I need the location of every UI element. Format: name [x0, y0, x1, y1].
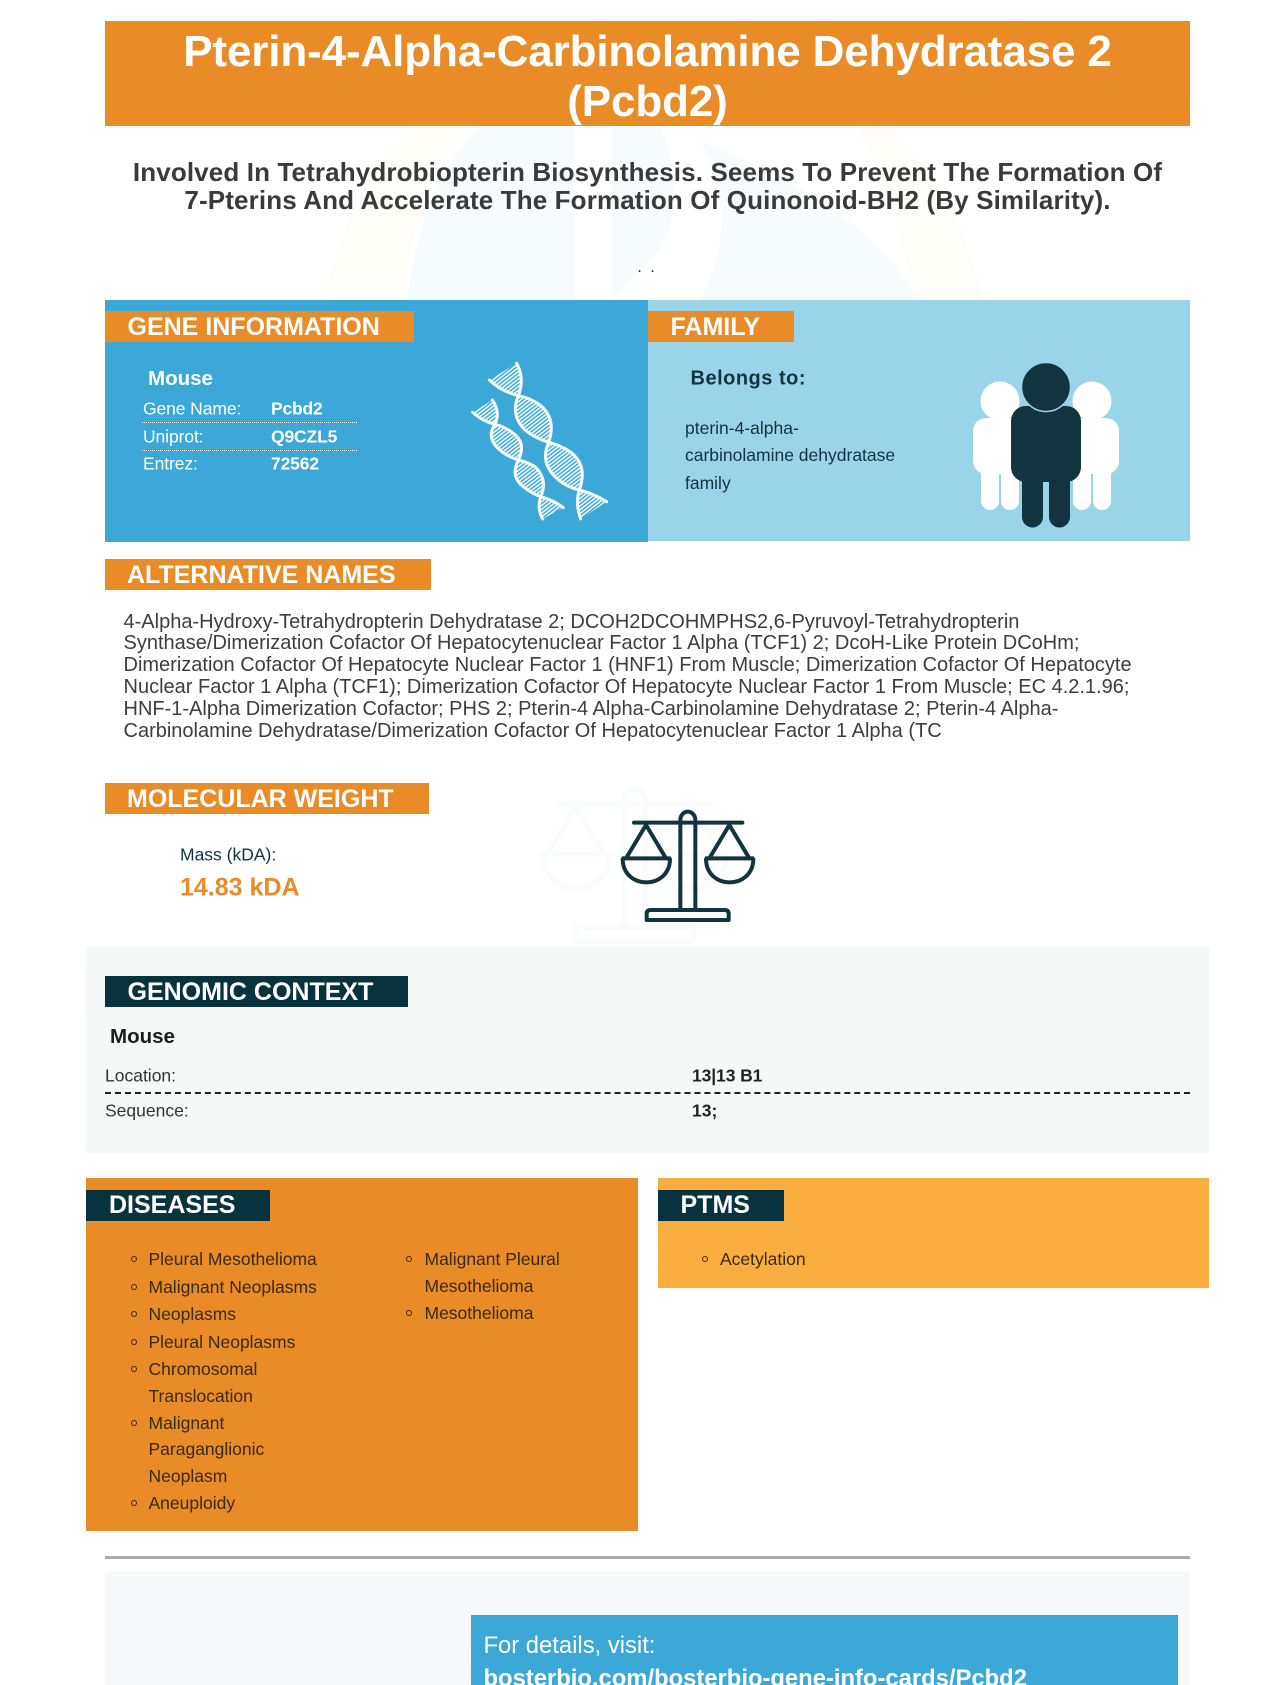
title text — [183, 27, 1112, 126]
gene table: Entrez: — [143, 454, 198, 474]
gene table: Gene Name: — [143, 398, 241, 418]
heading: diseases: DISEASES — [109, 1191, 235, 1219]
mass label: Mass (kDA): — [180, 844, 276, 864]
alternative names text: Dimerization Cofactor Of Hepatocyte Nuclear Factor 1 (HNF1) From Muscle; Dimerization Cofactor Of Hepatocyte — [124, 654, 1132, 676]
heading: molecular weight: MOLECULAR WEIGHT — [127, 785, 394, 813]
alternative names text: Nuclear Factor 1 Alpha (TCF1); Dimerization Cofactor Of Hepatocyte Nuclear Factor 1 From Muscle; EC 4.2.1.96; — [124, 676, 1129, 698]
mass value: 14.83 kDA — [180, 873, 300, 901]
icon: people — [973, 363, 1119, 528]
disease list column 1: Neoplasms — [148, 1304, 236, 1324]
icon: scale — [620, 810, 756, 922]
location row — [105, 1066, 762, 1086]
callout text — [484, 1632, 1027, 1685]
alternative names text: 4-Alpha-Hydroxy-Tetrahydropterin Dehydratase 2; DCOH2DCOHMPHS2,6-Pyruvoyl-Tetrahydropterin — [124, 610, 1019, 632]
disease list column 2: Malignant Pleural — [424, 1248, 560, 1268]
location row: Location: — [105, 1066, 176, 1086]
location row: 13|13 B1 — [692, 1066, 762, 1086]
disease list column 1: Aneuploidy — [148, 1492, 235, 1512]
family name — [685, 418, 895, 492]
disease list column 1: Chromosomal — [148, 1358, 257, 1378]
panel: gene information — [105, 300, 648, 542]
ptm list: Acetylation — [720, 1248, 806, 1268]
background watermark — [407, 126, 914, 300]
organism label: Mouse — [148, 366, 213, 390]
disease list column 1: Translocation — [148, 1386, 253, 1406]
heading: ptms: PTMS — [680, 1191, 750, 1219]
icon: dna — [471, 362, 608, 521]
gene table: 72562 — [271, 454, 319, 474]
alternative names text: Carbinolamine Dehydratase/Dimerization Cofactor Of Hepatocytenuclear Factor 1 Alpha (TC — [124, 720, 942, 742]
sequence row: Sequence: — [105, 1100, 189, 1120]
subtitle: Involved In Tetrahydrobiopterin Biosynthesis. Seems To Prevent The Formation Of — [133, 157, 1162, 187]
panel: genomic context — [86, 947, 1209, 1153]
panel: diseases — [86, 1178, 638, 1531]
sequence row — [105, 1100, 717, 1120]
disease list column 1 — [131, 1248, 317, 1512]
disease list column 2 — [406, 1248, 560, 1322]
belongs to: Belongs to: — [690, 367, 806, 389]
subtitle — [133, 157, 1162, 215]
gene table: Q9CZL5 — [271, 426, 337, 446]
heading: genomic context: GENOMIC CONTEXT — [128, 978, 373, 1006]
heading: ptms — [658, 1190, 784, 1221]
disease list column 1: Pleural Neoplasms — [148, 1332, 295, 1352]
family name: family — [685, 472, 731, 492]
subtitle: 7-Pterins And Accelerate The Formation Of Quinonoid-BH2 (By Similarity). — [184, 185, 1111, 215]
family name: carbinolamine dehydratase — [685, 445, 895, 465]
heading: family — [648, 311, 794, 342]
heading: gene information: GENE INFORMATION — [128, 313, 380, 341]
disease list column 1: Malignant — [148, 1412, 224, 1432]
title text: Pterin-4-Alpha-Carbinolamine Dehydratase 2 — [183, 27, 1112, 76]
heading: alternative names: ALTERNATIVE NAMES — [127, 561, 396, 589]
title banner — [105, 21, 1190, 126]
panel: ptms — [658, 1178, 1209, 1288]
callout text: For details, visit: — [484, 1632, 655, 1659]
dots: . . — [637, 259, 657, 276]
disease list column 2: Mesothelioma — [424, 1276, 533, 1296]
disease list column 1: Malignant Neoplasms — [148, 1276, 317, 1296]
disease list column 1: Pleural Mesothelioma — [148, 1248, 317, 1268]
disease list column 1: Neoplasm — [148, 1466, 227, 1486]
icon: faint scale watermark — [525, 772, 755, 952]
title text: (Pcbd2) — [567, 77, 728, 126]
disease list column 2: Mesothelioma — [424, 1302, 533, 1322]
gene table: Uniprot: — [143, 426, 203, 446]
panel: footer — [105, 1571, 1190, 1685]
heading: diseases — [86, 1190, 270, 1221]
heading: family: FAMILY — [670, 313, 760, 341]
panel: family — [648, 300, 1190, 541]
sequence row: 13; — [692, 1100, 717, 1120]
alternative names text: Synthase/Dimerization Cofactor Of Hepatocytenuclear Factor 1 Alpha (TCF1) 2; DcoH-Like Protein DCoHm; — [124, 632, 1079, 654]
organism label: Mouse — [110, 1025, 175, 1048]
family name: pterin-4-alpha- — [685, 418, 799, 438]
callout: details link — [471, 1615, 1178, 1685]
alternative names text: HNF-1-Alpha Dimerization Cofactor; PHS 2; Pterin-4 Alpha-Carbinolamine Dehydratase 2; Pterin-4 Alpha- — [124, 698, 1058, 720]
gene table — [142, 398, 357, 474]
disease list column 1: Paraganglionic — [148, 1438, 264, 1458]
alternative names text — [124, 610, 1132, 742]
gene table: Pcbd2 — [271, 398, 323, 418]
